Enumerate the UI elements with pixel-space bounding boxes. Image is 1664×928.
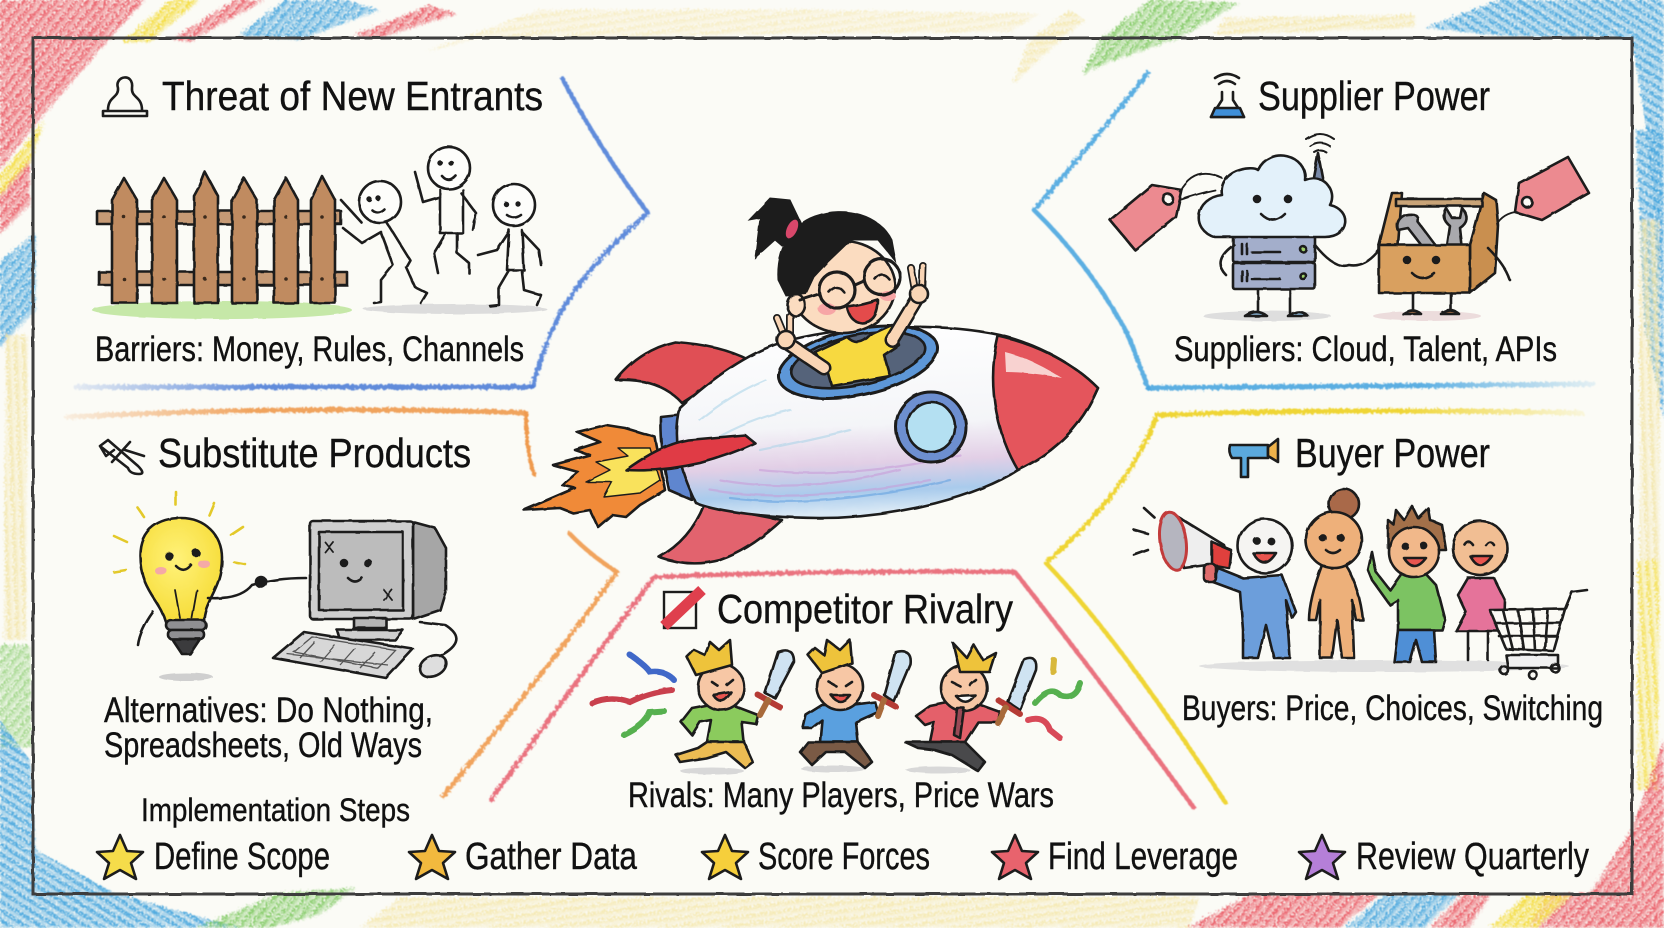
caption: alternatives, two lines: Spreadsheets, Old Ways	[104, 726, 422, 765]
heading icon: flask with signal	[1211, 74, 1244, 117]
rocket top fin	[616, 342, 749, 403]
bulb glass	[140, 518, 222, 622]
shadow under figures	[363, 304, 547, 314]
left price tag	[1110, 174, 1222, 250]
star icon, red	[992, 835, 1038, 879]
bulb arms and handshake	[138, 577, 306, 645]
heading icon: blue megaphone	[1229, 439, 1278, 477]
stick figure pushing the fence	[341, 181, 427, 303]
yellow crayon panel border	[1046, 411, 1581, 802]
caption: rivals: Rivals: Many Players, Price Wars	[628, 776, 1054, 815]
rocket bottom fin	[659, 505, 782, 563]
rocket body	[677, 327, 1098, 518]
orange crayon panel border	[67, 410, 617, 796]
illustration: three crowned rivals with swords	[592, 640, 1080, 774]
girl hair	[778, 212, 896, 296]
bulb screw base	[166, 620, 206, 654]
steps heading: Implementation Steps	[141, 792, 410, 828]
nose highlight	[1005, 352, 1062, 378]
caption: suppliers: Suppliers: Cloud, Talent, APIs	[1174, 330, 1557, 369]
rocket flame	[524, 425, 665, 527]
blue person	[1213, 519, 1296, 658]
caption: alternatives, two lines: Alternatives: Do Nothing,	[104, 691, 433, 730]
orange person face	[1320, 535, 1344, 553]
blue crayon panel border	[76, 78, 648, 387]
step 4: find leverage	[992, 835, 1238, 879]
step label: Define Scope	[154, 836, 330, 878]
server stack	[1233, 236, 1315, 289]
star icon, amber	[409, 835, 455, 879]
toolbox	[1379, 193, 1498, 293]
step 3: score forces	[702, 835, 930, 879]
cloud eyes and smile	[1254, 196, 1291, 220]
shadows	[680, 766, 970, 774]
heading icon: person bust	[103, 77, 147, 116]
heading: competitor rivalry: Competitor Rivalry	[717, 586, 1013, 632]
right price tag	[1495, 157, 1589, 228]
heading: buyer power: Buyer Power	[1295, 430, 1490, 476]
blue crayon panel border	[1034, 73, 1593, 388]
green person face	[1402, 543, 1427, 566]
caption: alternatives, two lines	[104, 691, 433, 765]
open smile	[847, 300, 878, 323]
rocket nose cone	[993, 336, 1098, 470]
grass	[92, 301, 352, 319]
body crayon hatching	[700, 380, 960, 501]
step label: Gather Data	[465, 836, 638, 878]
bulb face	[166, 550, 199, 618]
heading icon: crossed tools	[100, 440, 144, 474]
girl shirt	[815, 325, 899, 386]
step 1: define scope	[97, 835, 330, 879]
panel: competitor rivalry	[491, 572, 1194, 815]
step label: Find Leverage	[1048, 836, 1238, 878]
confetti ribbons	[592, 654, 1080, 738]
peace sign hands	[777, 266, 928, 349]
hair tie	[783, 218, 801, 240]
step label: Score Forces	[758, 836, 930, 878]
shadows	[1203, 311, 1331, 321]
stick figure walking	[478, 184, 541, 306]
pink person	[1453, 521, 1507, 660]
mouse and cord	[416, 622, 456, 681]
implementation steps	[97, 792, 1589, 879]
step 5: review quarterly	[1299, 835, 1589, 879]
green person	[1368, 506, 1446, 662]
rocket porthole window	[896, 392, 966, 462]
star icon, gold	[702, 835, 748, 879]
heading: threat of new entrants: Threat of New Entrants	[162, 73, 543, 119]
stick figure jumping	[415, 147, 476, 273]
antenna	[1306, 134, 1334, 180]
rocket nozzle	[661, 415, 692, 500]
fence rails	[97, 211, 347, 285]
red crayon panel border	[491, 572, 1194, 808]
megaphone	[1156, 510, 1231, 582]
sword two	[874, 651, 910, 716]
girl	[749, 198, 928, 386]
step label: Review Quarterly	[1356, 836, 1589, 878]
illustration: fence and stick figures	[92, 147, 547, 319]
shopping cart	[1490, 590, 1587, 679]
monitor	[310, 521, 446, 640]
round glasses and smiling eyes	[800, 259, 900, 308]
toolbox face and legs	[1403, 248, 1510, 314]
pink person face	[1465, 542, 1494, 565]
illustration: lightbulb and old computer	[114, 492, 456, 681]
cheeks	[818, 291, 896, 315]
star icon, yellow	[97, 835, 143, 879]
rival one, green	[676, 640, 758, 768]
blue person face	[1253, 538, 1276, 562]
sword three	[998, 658, 1036, 723]
panel: substitute products	[67, 410, 617, 796]
keyboard	[273, 632, 413, 678]
rocket cockpit	[772, 313, 944, 411]
panel: buyer power	[1046, 411, 1603, 802]
heading: substitute products: Substitute Products	[158, 430, 471, 476]
server arms and legs	[1221, 245, 1379, 316]
illustration: buyers with megaphone and cart	[1134, 489, 1587, 679]
girl ear	[787, 294, 805, 316]
ground shadow	[1199, 660, 1569, 672]
sword one	[758, 650, 794, 715]
fence nails	[122, 215, 324, 281]
megaphone sound lines	[1134, 508, 1155, 555]
orange person with bun	[1306, 489, 1363, 658]
bulb cheeks	[155, 560, 210, 575]
shadow under bulb	[159, 673, 213, 681]
fence pickets	[112, 172, 335, 303]
server details	[1242, 244, 1306, 281]
bulb rays	[114, 492, 245, 572]
side fin	[626, 435, 755, 470]
central rocket with girl	[524, 198, 1098, 563]
panel: supplier power	[1034, 73, 1593, 388]
caption: barriers: Barriers: Money, Rules, Channels	[95, 330, 524, 369]
step 2: gather data	[409, 835, 638, 879]
cloud face	[1199, 156, 1345, 237]
rival two, blue	[800, 640, 878, 768]
girl face	[791, 241, 895, 333]
star icon, purple	[1299, 835, 1345, 879]
rival three, red	[905, 643, 1000, 771]
monitor face	[325, 542, 392, 600]
illustration: cloud server and toolbox	[1110, 134, 1589, 321]
girl arms	[790, 300, 916, 368]
panel: threat of new entrants	[76, 73, 648, 387]
ponytail	[749, 198, 802, 258]
heading: supplier power: Supplier Power	[1258, 73, 1490, 119]
heading icon: slashed box	[664, 590, 702, 628]
